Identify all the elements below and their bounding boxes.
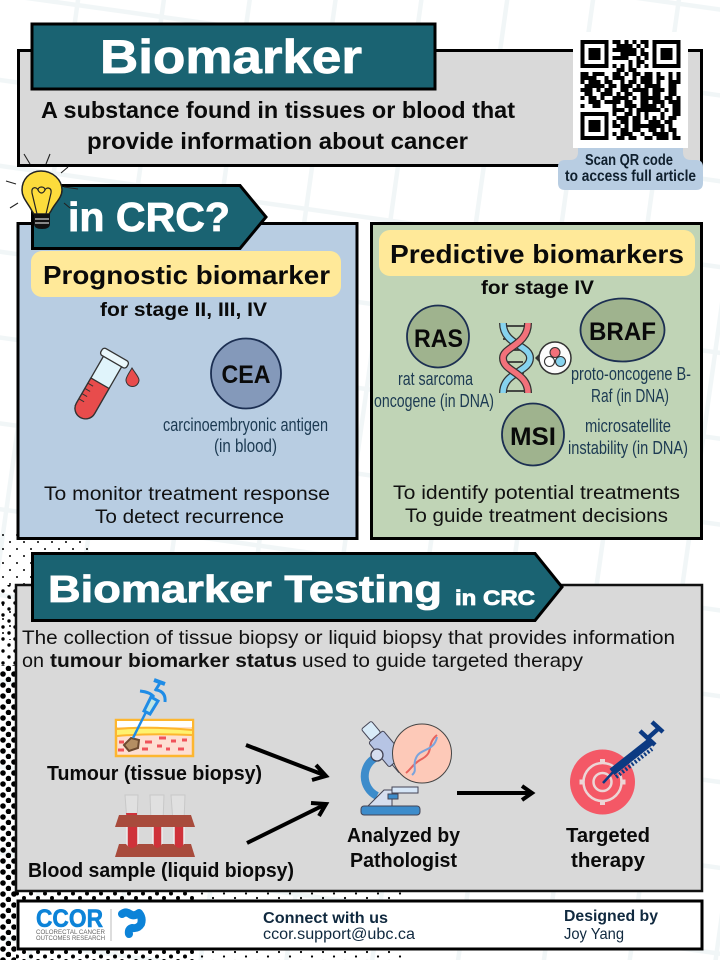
QR caption: to access full article (565, 168, 696, 185)
heading ribbon: in CRC?: in CRC? (68, 194, 230, 240)
RAS marker: RAS (414, 325, 463, 353)
predictive uses: To guide treatment decisions (405, 505, 668, 527)
definition text: provide information about cancer (87, 128, 468, 154)
contact (263, 910, 415, 943)
therapy label (566, 824, 650, 872)
CCOR logo: OUTCOMES RESEARCH (36, 936, 105, 942)
icon: target and syringe (570, 722, 663, 814)
panel: definition (18, 50, 702, 166)
icon: light bulb (6, 154, 78, 229)
blood sample label: Blood sample (liquid biopsy) (28, 859, 294, 882)
halftone dots (0, 530, 406, 960)
panel: prognostic biomarker (18, 224, 357, 538)
arrow: tissue to pathologist (246, 745, 326, 780)
MSI caption: microsatellite (585, 415, 671, 436)
RAS caption: oncogene (in DNA) (374, 390, 494, 411)
heading pill (31, 251, 341, 297)
prognostic uses: To monitor treatment response (44, 483, 330, 505)
heading ribbon: biomarker testing (32, 554, 562, 620)
icon: blood tubes in rack (115, 795, 195, 857)
BRAF marker (571, 298, 691, 406)
CCOR logo (36, 905, 142, 942)
therapy label: Targeted (566, 824, 650, 847)
predictive uses (393, 482, 680, 527)
heading pill (379, 230, 695, 276)
panel: predictive biomarkers (372, 224, 702, 538)
testing description (22, 627, 675, 672)
contact: ccor.support@ubc.ca (263, 926, 415, 943)
heading pill: Predictive biomarkers (390, 239, 684, 269)
MSI caption (568, 415, 688, 458)
heading ribbon: biomarker testing: Biomarker Testing (48, 569, 442, 611)
designer credit: Designed by (564, 908, 658, 925)
QR code with caption (558, 32, 703, 190)
footer (18, 901, 702, 949)
CEA marker: CEA (222, 361, 270, 389)
BRAF caption (571, 363, 691, 406)
heading ribbon: in CRC? (32, 186, 266, 248)
BRAF caption: Raf (in DNA) (591, 385, 669, 406)
prognostic uses: To detect recurrence (95, 506, 284, 528)
MSI marker (502, 404, 688, 466)
RAS marker (374, 306, 494, 411)
arrow: blood to pathologist (247, 803, 326, 843)
title (32, 24, 435, 89)
testing description: used to guide targeted therapy (302, 650, 583, 672)
icon: DNA helix with molecule (503, 323, 571, 393)
definition text: A substance found in tissues or blood that (41, 97, 515, 123)
CEA caption: carcinoembryonic antigen (163, 414, 328, 435)
MSI caption: instability (in DNA) (568, 437, 688, 458)
testing description: on (22, 650, 44, 672)
QR matrix (580, 42, 680, 138)
QR caption (565, 152, 696, 185)
therapy label: therapy (571, 849, 646, 872)
RAS caption: rat sarcoma (398, 368, 474, 389)
arrow: pathologist to therapy (457, 786, 532, 800)
title: Biomarker (100, 30, 362, 83)
testing description: tumour biomarker status (50, 650, 297, 672)
pathologist label: Analyzed by (347, 824, 461, 847)
CCOR logo: CCOR (36, 905, 103, 933)
predictive uses: To identify potential treatments (393, 482, 680, 504)
icon: microscope (359, 719, 452, 815)
CEA caption (163, 414, 328, 456)
pathologist label (347, 824, 461, 872)
BRAF caption: proto-oncogene B- (571, 363, 691, 384)
panel: biomarker testing (16, 585, 702, 891)
contact: Connect with us (263, 910, 388, 927)
icon: tissue biopsy (116, 680, 193, 756)
stage note: for stage IV (481, 277, 594, 299)
heading ribbon: biomarker testing: in CRC (455, 587, 535, 610)
definition text (41, 97, 515, 154)
CCOR logo: COLORECTAL CANCER (36, 930, 106, 936)
icon: test tube with blood (67, 347, 139, 425)
heading pill: Prognostic biomarker (43, 260, 330, 290)
prognostic uses (44, 483, 330, 528)
stage note: for stage II, III, IV (100, 299, 267, 321)
BRAF marker: BRAF (589, 318, 656, 346)
MSI marker: MSI (510, 423, 556, 451)
pathologist label: Pathologist (350, 849, 457, 872)
QR caption: Scan QR code (585, 152, 673, 169)
tissue biopsy label: Tumour (tissue biopsy) (47, 762, 262, 785)
testing description: The collection of tissue biopsy or liquid biopsy that provides information (22, 627, 675, 649)
CEA caption: (in blood) (214, 435, 277, 456)
CEA marker (163, 338, 328, 456)
designer credit: Joy Yang (564, 926, 624, 943)
designer credit (564, 908, 658, 943)
RAS caption (374, 368, 494, 411)
